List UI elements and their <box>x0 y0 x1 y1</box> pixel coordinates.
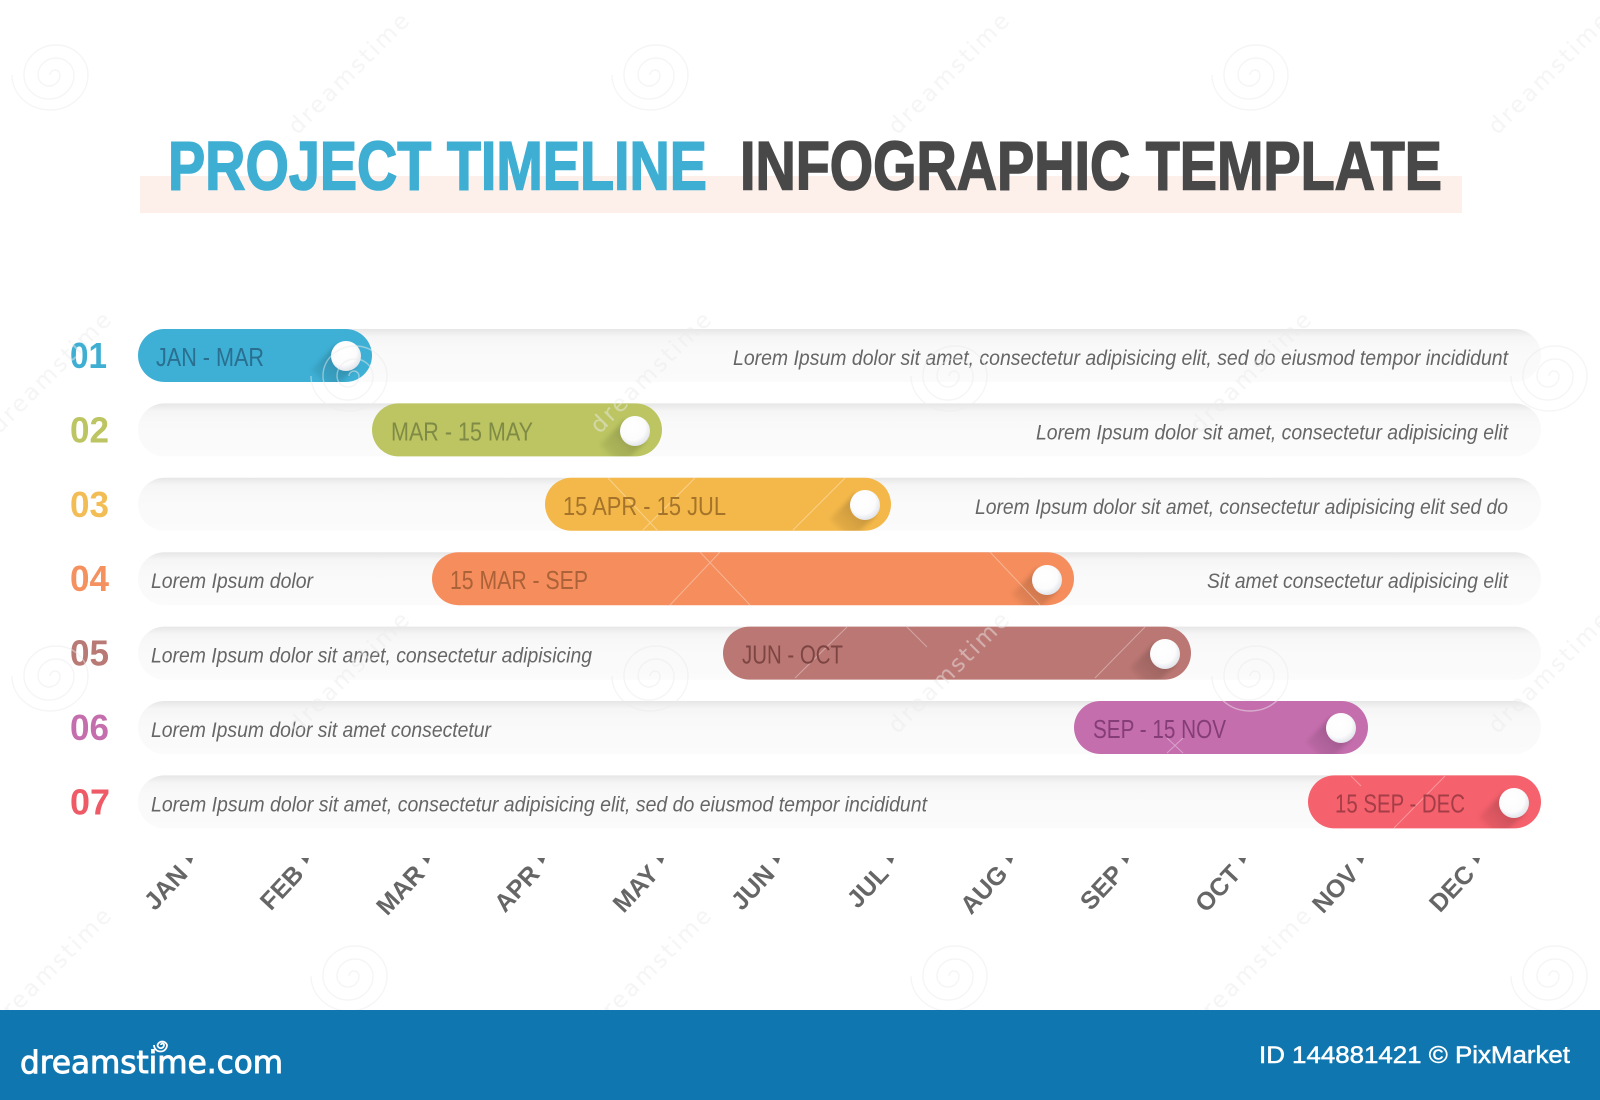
title <box>140 128 1462 213</box>
watermark layer: dreamstime <box>883 607 1015 739</box>
month JUN: JUN <box>726 860 780 916</box>
watermark layer: dreamstime <box>585 307 717 439</box>
row 02 <box>71 403 1536 456</box>
title blue part: PROJECT TIMELINE <box>168 128 707 204</box>
description 05: Lorem Ipsum dolor sit amet, consectetur adipisicing <box>151 645 592 668</box>
number 07: 07 <box>70 781 110 822</box>
month MAR: MAR <box>371 860 430 921</box>
month OCT: OCT <box>1190 860 1246 918</box>
watermark layer: dreamstime <box>1185 903 1317 1035</box>
bar 07: 15 SEP - DEC <box>1335 788 1465 818</box>
number 03: 03 <box>70 484 109 525</box>
bar 07 <box>1308 775 1541 828</box>
track 03 <box>138 478 1541 531</box>
bar 06: SEP - 15 NOV <box>1093 714 1227 744</box>
description 02: Lorem Ipsum dolor sit amet, consectetur adipisicing elit <box>1036 421 1509 444</box>
bar 03: 15 APR - 15 JUL <box>563 491 726 521</box>
title dark part: INFOGRAPHIC TEMPLATE <box>740 128 1442 204</box>
footer logo: dreamstime.com <box>20 1045 283 1081</box>
month JAN: JAN <box>139 860 193 916</box>
month axis <box>139 858 1480 921</box>
bar 06 <box>1074 701 1368 754</box>
watermark layer: dreamstime <box>1185 307 1317 439</box>
month JUL: JUL <box>842 860 894 914</box>
description 01: Lorem Ipsum dolor sit amet, consectetur adipisicing elit, sed do eiusmod tempor incididunt <box>733 347 1509 370</box>
month NOV: NOV <box>1307 860 1365 919</box>
bar 03 <box>545 478 891 531</box>
title highlight band <box>140 176 1462 213</box>
number 04: 04 <box>70 558 109 599</box>
row 07 <box>71 775 1541 828</box>
bar 05 <box>723 626 1191 680</box>
watermark layer: dreamstime <box>283 8 415 140</box>
row 06 <box>71 701 1536 754</box>
bar 01: JAN - MAR <box>156 342 264 372</box>
month DEC: DEC <box>1424 860 1480 918</box>
number 05: 05 <box>70 633 109 674</box>
track 07 <box>138 775 1541 828</box>
track 04 <box>138 552 1541 605</box>
description 04 left: Lorem Ipsum dolor <box>151 570 314 593</box>
description 07: Lorem Ipsum dolor sit amet, consectetur adipisicing elit, sed do eiusmod tempor incididunt <box>151 793 928 816</box>
watermark layer: dreamstime <box>283 607 415 739</box>
bar 04 <box>432 552 1074 606</box>
track 01 <box>138 329 1541 382</box>
track 06 <box>138 701 1541 754</box>
description 04 right: Sit amet consectetur adipisicing elit <box>1207 570 1509 593</box>
description 03: Lorem Ipsum dolor sit amet, consectetur adipisicing elit sed do <box>975 496 1508 519</box>
row 03 <box>71 478 1536 531</box>
month APR: APR <box>489 860 545 918</box>
month SEP: SEP <box>1075 860 1129 916</box>
bar 01 <box>138 329 372 382</box>
month AUG: AUG <box>955 860 1013 920</box>
number 02: 02 <box>70 409 109 450</box>
track 05 <box>138 627 1541 680</box>
number 06: 06 <box>70 707 109 748</box>
watermark layer: dreamstime <box>883 8 1015 140</box>
row 04 <box>71 552 1536 606</box>
row 05 <box>71 626 1536 680</box>
row 01 <box>71 329 1536 382</box>
bar 02 <box>372 403 662 456</box>
footer band <box>0 1010 1600 1100</box>
watermark layer: dreamstime <box>585 903 717 1035</box>
number 01: 01 <box>70 335 107 376</box>
bar 05: JUN - OCT <box>742 640 843 670</box>
bar 04: 15 MAR - SEP <box>450 565 588 595</box>
bar 02: MAR - 15 MAY <box>391 416 533 446</box>
description 06: Lorem Ipsum dolor sit amet consectetur <box>151 719 492 742</box>
month FEB: FEB <box>255 860 309 916</box>
track 02 <box>138 403 1541 456</box>
month MAY: MAY <box>608 860 665 918</box>
footer credit: ID 144881421 © PixMarket <box>1259 1042 1570 1069</box>
